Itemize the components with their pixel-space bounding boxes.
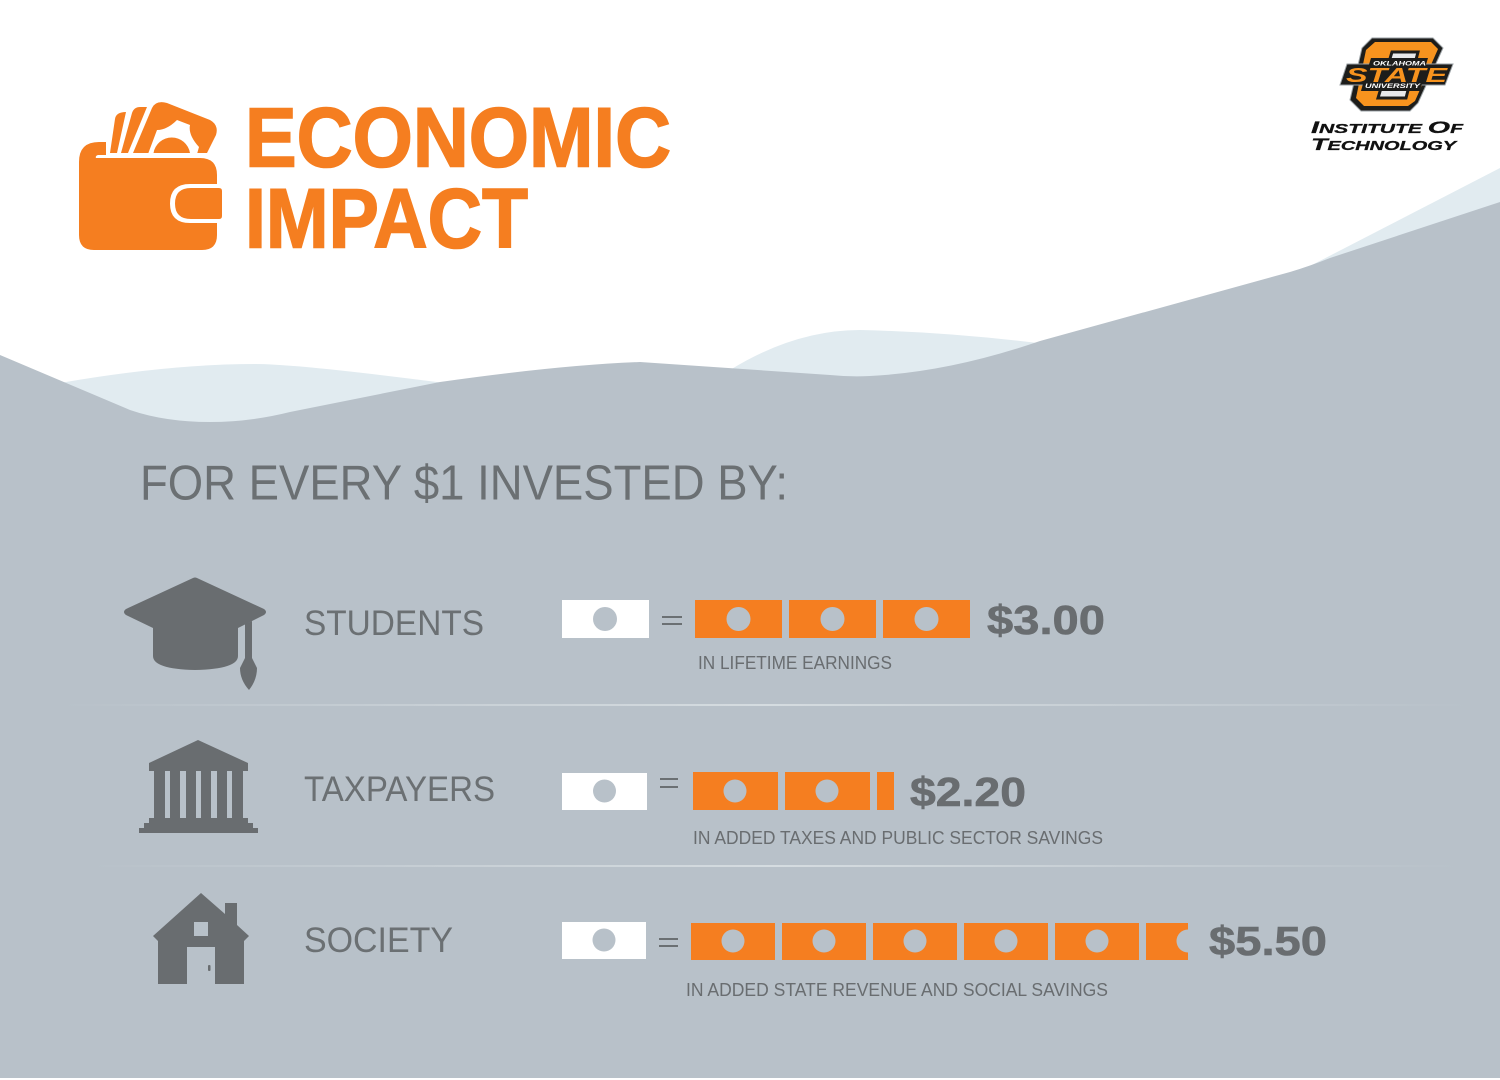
title: IMPACT [245,172,528,266]
icon: wallet [79,102,222,250]
icon: government building [139,740,258,833]
value: $2.20: $2.20 [910,769,1026,815]
icon: house [153,893,249,984]
caption: taxes and savings: IN ADDED TAXES AND PUBLIC SECTOR SAVINGS [693,827,1103,848]
divider lines [60,704,1470,867]
caption: state revenue and savings: IN ADDED STATE REVENUE AND SOCIAL SAVINGS [686,979,1108,1000]
logo: Oklahoma State University Institute of Technology: T ECHNOLOGY [1311,135,1459,154]
logo: Oklahoma State University Institute of Technology [1311,38,1464,154]
logo: Oklahoma State University Institute of Technology: STATE [1346,65,1448,87]
icon: door knob [208,965,210,971]
value: $5.50: $5.50 [1209,918,1327,964]
title [245,90,671,266]
caption: lifetime earnings: IN LIFETIME EARNINGS [698,652,892,673]
equation: one dollar equals two dollars twenty [562,772,894,810]
icon: graduation cap [124,578,266,690]
title: ECONOMIC [245,90,671,184]
equation: one dollar equals five dollars fifty [562,922,1200,960]
logo: Oklahoma State University Institute of Technology: UNIVERSITY [1365,83,1421,90]
value: $3.00: $3.00 [987,597,1105,643]
label: taxpayers: TAXPAYERS [304,770,495,809]
row: society [153,893,1327,1000]
label: society: SOCIETY [304,921,453,960]
label: students: STUDENTS [304,604,484,643]
row: students [124,578,1105,690]
row: taxpayers [139,740,1103,848]
heading: for every $1 invested by: FOR EVERY $1 INVESTED BY: [140,456,788,510]
logo: Oklahoma State University Institute of Technology: I NSTITUTE O F [1311,118,1464,137]
logo: Oklahoma State University Institute of Technology: OKLAHOMA [1373,60,1426,68]
equation: one dollar equals three dollars [562,600,970,638]
